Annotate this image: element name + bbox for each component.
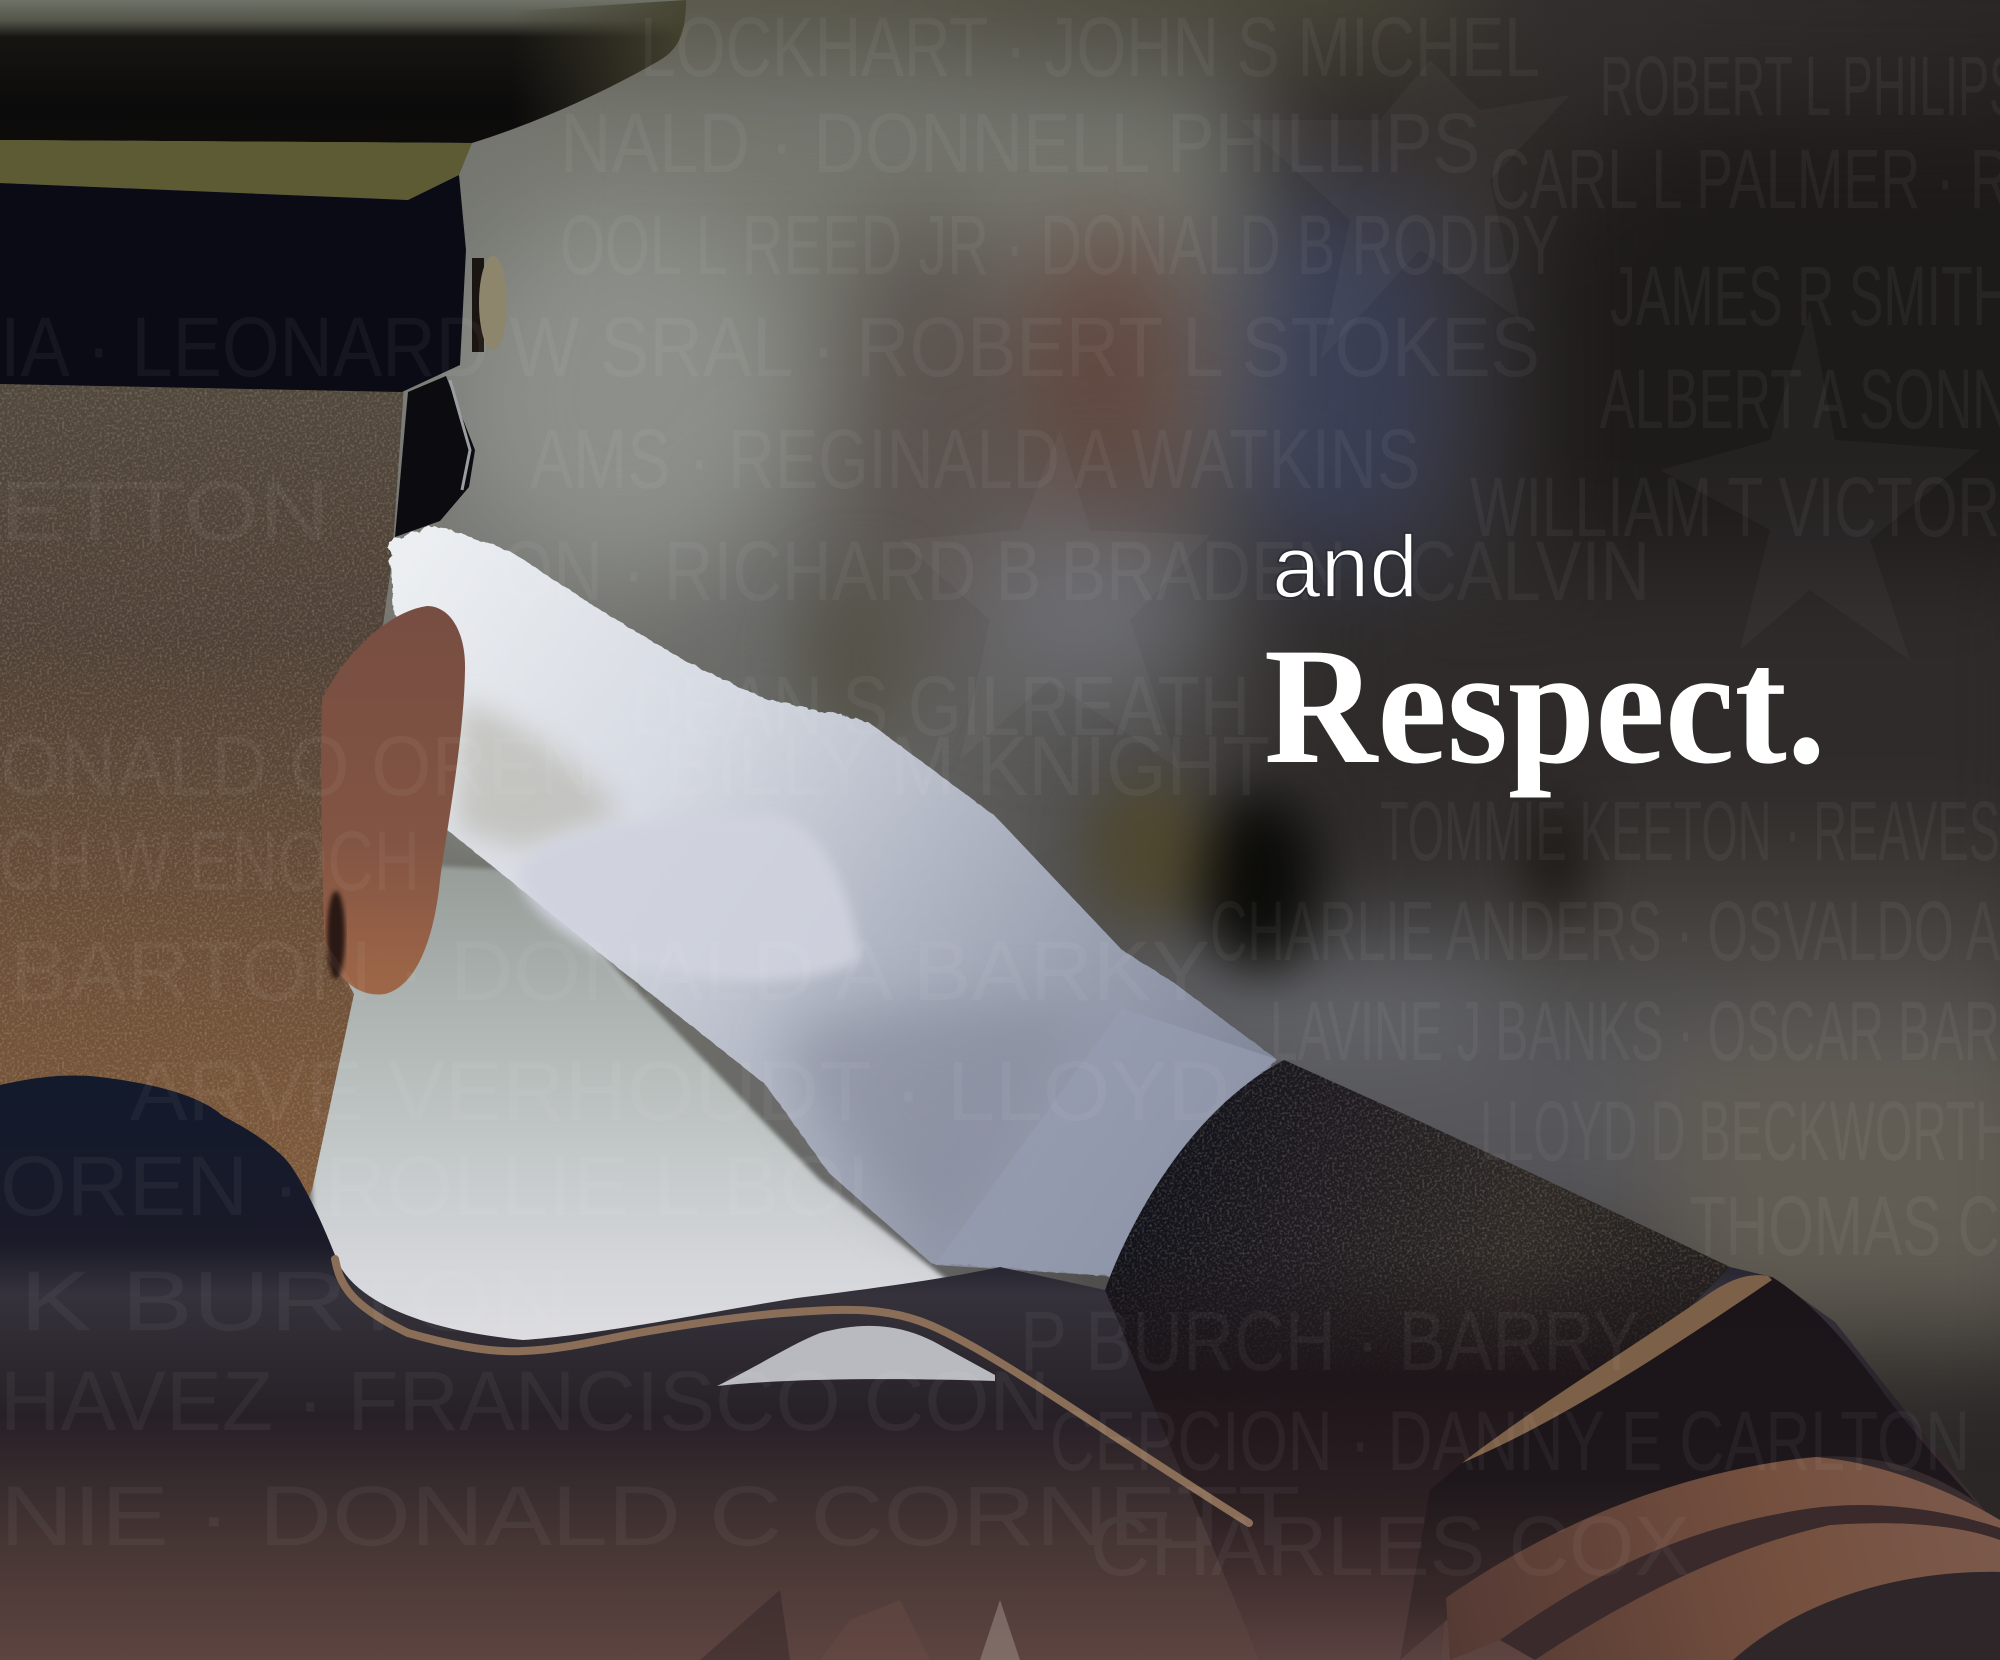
memorial names: ONALD O OREN · BILLY M KNIGHT — [0, 719, 1270, 813]
memorial names: IA · LEONARD W SRAL · ROBERT L STOKES — [0, 300, 1540, 394]
memorial names: NIE · DONALD C CORNETT — [0, 1469, 1300, 1563]
glove thumb — [517, 815, 860, 981]
memorial names: ON · RICHARD B BRADEN · CALVIN — [500, 524, 1650, 618]
memorial names: ARVE VERHOUDT · LLOYD — [130, 1044, 1230, 1138]
memorial names: NALD · DONNELL PHILLIPS — [560, 96, 1480, 190]
bottom star fragments — [700, 1590, 1020, 1660]
memorial names: LOCKHART · JOHN S MICHEL — [640, 0, 1540, 94]
memorial names: CHARLES COX — [1090, 1499, 1690, 1593]
shoulder stripes — [1446, 1457, 2000, 1660]
gold coat piping — [335, 1259, 1249, 1523]
white gap under coat piping — [717, 1326, 995, 1386]
cap dark band — [0, 175, 466, 392]
glove palm shading — [780, 1004, 1090, 1250]
soldier head and neck — [0, 380, 404, 1240]
memorial names: K BURTON — [20, 1254, 570, 1348]
ear inner shadow — [327, 891, 345, 979]
shoulder panel — [1400, 1277, 1976, 1660]
memorial names: ETTON — [0, 464, 330, 558]
glove finger creases — [455, 700, 620, 850]
faint stars — [900, 60, 1980, 770]
gold shoulder piping — [1462, 1275, 1772, 1463]
memorial names: OREN · ROLLIE L BOI — [0, 1139, 870, 1233]
dark coat body — [0, 1060, 2000, 1660]
cap brim — [0, 0, 686, 143]
cap button — [472, 256, 507, 352]
glove cuff — [935, 1008, 1276, 1276]
sleeve — [1105, 1060, 1730, 1660]
memorial names: BARTON · DONALD A BARKY — [10, 924, 1210, 1018]
white backdrop between neck and glove — [300, 860, 1000, 1400]
cap gold band — [0, 140, 472, 200]
heading line: and: and — [1272, 517, 1418, 616]
memorial names: HAVEZ · FRANCISCO CON — [0, 1354, 1050, 1448]
memorial names: CH W ENOCH — [0, 814, 420, 908]
memorial names: DEAN S GILREATH — [630, 659, 1250, 753]
ear — [321, 606, 465, 994]
memorial names: P BURCH · BARRY — [1020, 1294, 1640, 1388]
memorial names: OOL L REED JR · DONALD B RODDY — [560, 198, 1560, 292]
glove — [389, 525, 1276, 1276]
cap visor — [395, 376, 475, 537]
memorial names: AMS · REGINALD A WATKINS — [530, 412, 1420, 506]
heading line: Respect.: Respect. — [1264, 614, 1826, 799]
